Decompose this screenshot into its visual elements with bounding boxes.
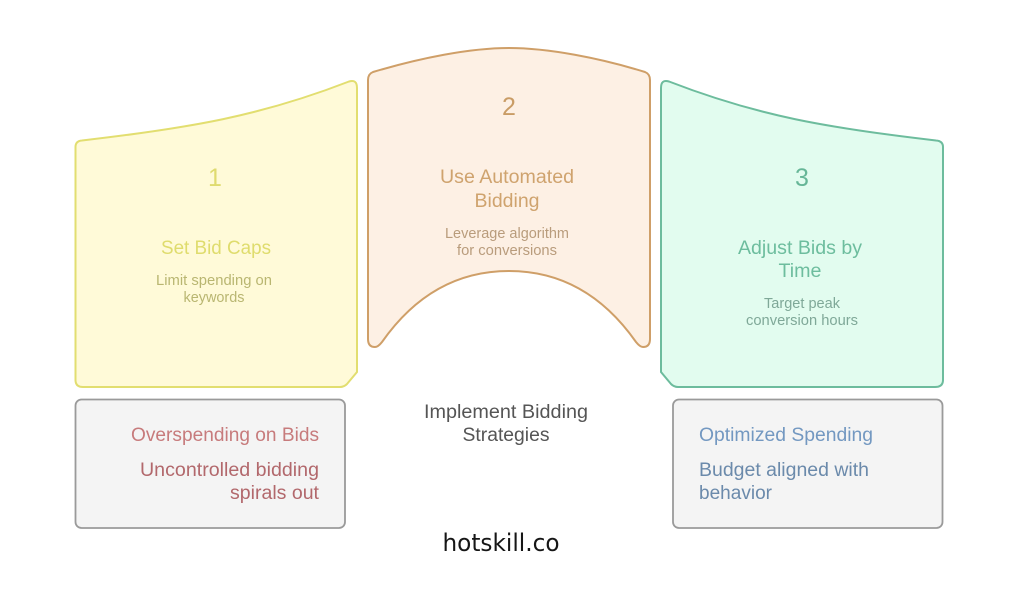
panel: step 3 adjust bids by time [661, 81, 943, 387]
description: budget aligned: behavior [699, 483, 773, 504]
step number 1: 1 [208, 164, 222, 192]
description: leverage algorithm: for conversions [457, 242, 557, 259]
heading: set bid caps: Set Bid Caps [161, 238, 271, 259]
description: target peak: conversion hours [746, 312, 858, 329]
description: uncontrolled bidding: spirals out [230, 483, 320, 504]
box: left [76, 400, 345, 528]
heading: adjust bids by time: Adjust Bids by [738, 238, 863, 259]
heading: use automated bidding: Use Automated [440, 167, 574, 188]
description: budget aligned: Budget aligned with [699, 460, 869, 481]
panel: step 2 use automated bidding [368, 48, 650, 347]
description: uncontrolled bidding: Uncontrolled bidding [140, 460, 319, 481]
description: leverage algorithm: Leverage algorithm [445, 225, 569, 242]
panel shape: yellow [76, 81, 357, 387]
panel shape: orange [368, 48, 650, 347]
step number 2: 2 [502, 93, 516, 121]
step number 3: 3 [795, 164, 809, 192]
box: right [673, 400, 942, 528]
panel: optimized spending [673, 400, 942, 528]
central label: implement bidding strategies: Strategies [462, 425, 550, 446]
panel: step 1 set bid caps [76, 81, 357, 387]
panel shape: green [661, 81, 943, 387]
description: limit spending: Limit spending on [156, 272, 272, 289]
footer: hotskill.co: hotskill.co [442, 529, 560, 557]
description: limit spending: keywords [184, 289, 244, 306]
central label: implement bidding strategies: Implement Bidding [424, 402, 588, 423]
heading: optimized spending: Optimized Spending [699, 425, 873, 446]
heading: overspending: Overspending on Bids [131, 425, 319, 446]
panel: overspending on bids [76, 400, 345, 528]
heading: use automated bidding: Bidding [474, 191, 540, 212]
heading: adjust bids by time: Time [778, 261, 822, 282]
description: target peak: Target peak [764, 295, 840, 312]
